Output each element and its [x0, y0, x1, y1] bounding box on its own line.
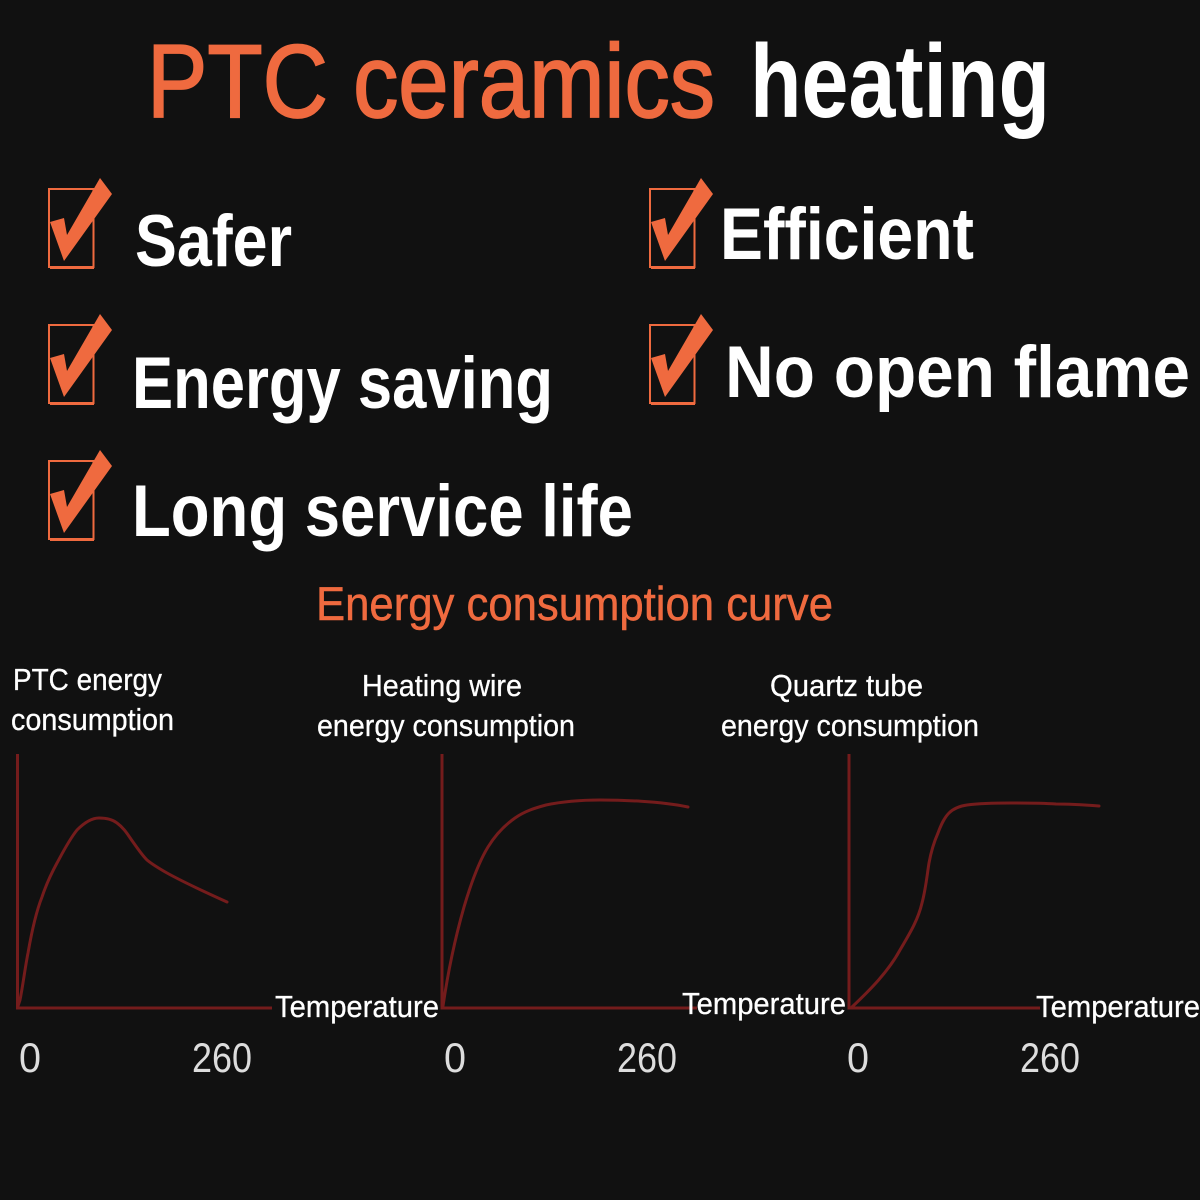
axis labels [19, 989, 439, 1081]
feature: Long service life: Long service life [132, 471, 633, 552]
axis labels: 260 [1020, 1034, 1080, 1081]
axes [849, 754, 1040, 1008]
axis labels: 0 [847, 1034, 869, 1081]
axis labels [444, 986, 846, 1081]
chart title: energy consumption [721, 708, 979, 743]
axis labels: Temperature [275, 989, 439, 1024]
chart title [317, 668, 575, 743]
curve [443, 800, 688, 1006]
curve [852, 803, 1099, 1007]
feature: Efficient [650, 178, 974, 275]
chart title [11, 662, 174, 737]
title: PTC ceramics [147, 24, 715, 140]
feature: No open flame [650, 314, 1190, 413]
axis labels: 0 [444, 1034, 466, 1081]
title: heating [750, 24, 1050, 140]
feature: Energy saving [49, 314, 553, 424]
chart title: PTC energy [13, 662, 162, 697]
axis labels: 260 [617, 1034, 677, 1081]
feature: Safer: Safer [135, 201, 292, 282]
chart title [721, 668, 979, 743]
curve [18, 818, 227, 1006]
axis labels: 0 [19, 1034, 41, 1081]
chart title: Heating wire [362, 668, 522, 703]
feature: Long service life [49, 450, 633, 552]
feature: Energy saving: Energy saving [132, 343, 553, 424]
axis labels: 260 [192, 1034, 252, 1081]
section heading: Energy consumption curve [316, 577, 833, 630]
chart: Heating wire energy consumption [317, 668, 846, 1081]
chart: Quartz tube energy consumption [721, 668, 1200, 1081]
feature: Safer [49, 178, 292, 282]
axis labels: Temperature [682, 986, 846, 1021]
chart: PTC energy consumption [11, 662, 439, 1081]
feature: Efficient: Efficient [720, 194, 974, 275]
axes [18, 754, 272, 1008]
chart title: consumption [11, 702, 174, 737]
axes [442, 754, 697, 1008]
chart title: energy consumption [317, 708, 575, 743]
axis labels [847, 989, 1200, 1081]
chart title: Quartz tube [770, 668, 923, 703]
